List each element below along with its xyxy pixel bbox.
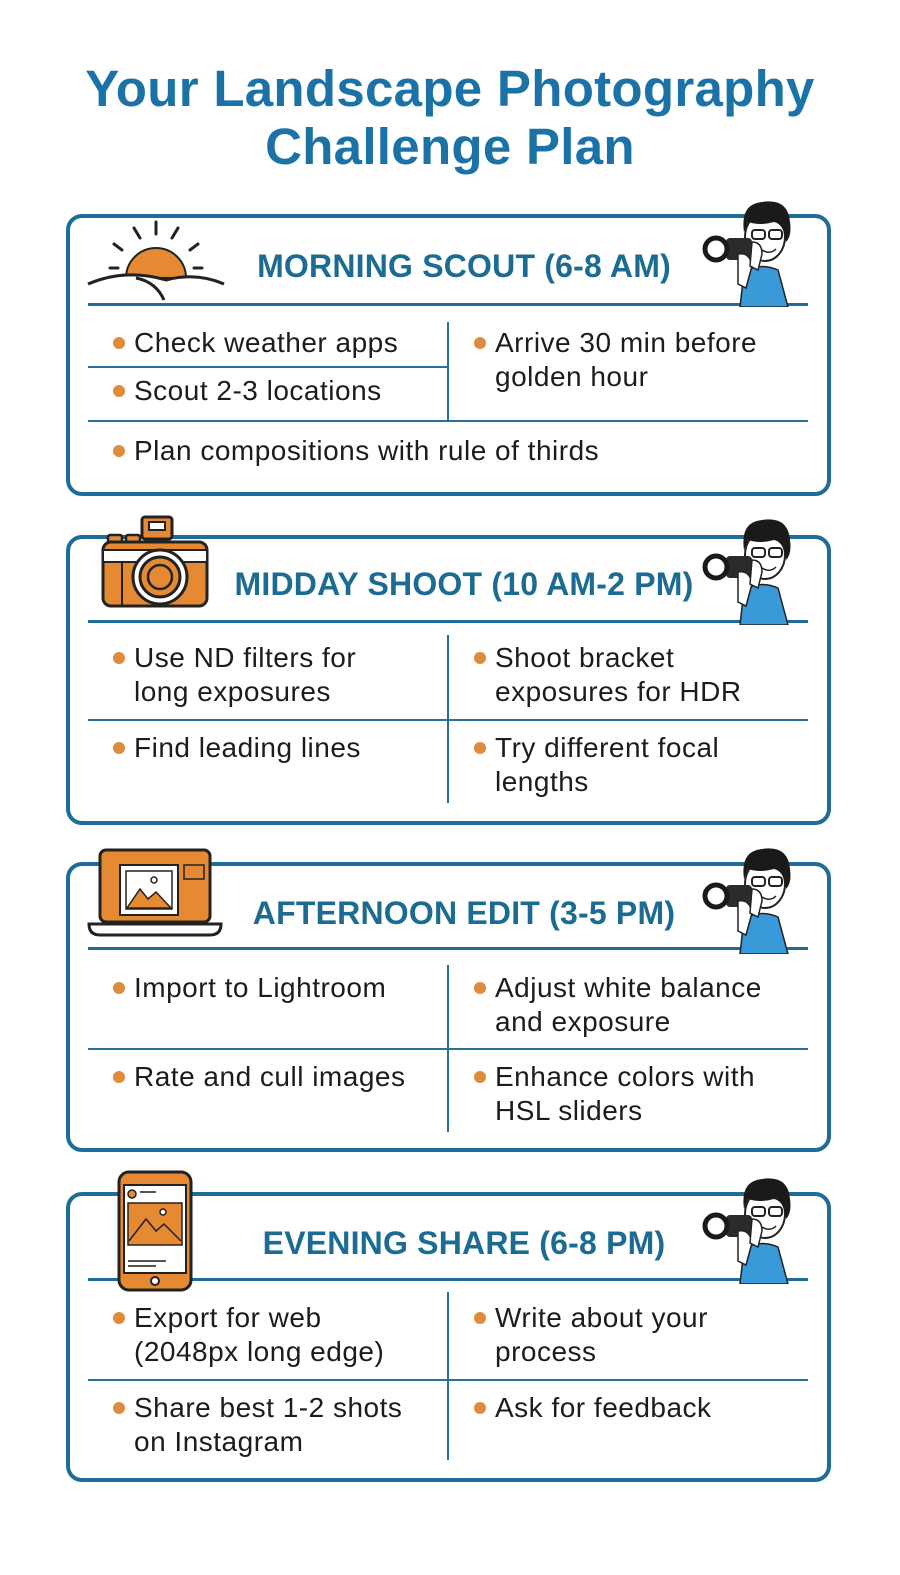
item: Enhance colors with xyxy=(495,1061,755,1092)
heading: afternoon edit: AFTERNOON EDIT (3-5 PM) xyxy=(253,895,675,931)
item: lengths xyxy=(495,766,589,797)
person icon xyxy=(702,1178,790,1284)
item: Shoot bracket xyxy=(495,642,674,673)
icon: phone xyxy=(118,1170,192,1292)
item xyxy=(495,1301,708,1369)
item: Adjust white balance xyxy=(495,972,762,1003)
person icon xyxy=(702,848,790,954)
item: exposures for HDR xyxy=(495,676,742,707)
item: long exposures xyxy=(134,676,331,707)
item: (2048px long edge) xyxy=(134,1336,384,1367)
panel: morning scout xyxy=(66,201,831,496)
item: Try different focal xyxy=(495,732,719,763)
heading: morning scout: MORNING SCOUT (6-8 AM) xyxy=(257,248,671,284)
item: Share best 1-2 shots xyxy=(134,1392,402,1423)
icon: laptop xyxy=(88,848,222,936)
item: on Instagram xyxy=(134,1426,303,1457)
item: and exposure xyxy=(495,1006,671,1037)
item: Rate and cull images xyxy=(134,1061,405,1092)
title: Your Landscape Photography xyxy=(85,60,815,117)
item: Scout 2-3 locations xyxy=(134,375,382,406)
item: Import to Lightroom xyxy=(134,972,386,1003)
item: Write about your xyxy=(495,1302,708,1333)
item: Plan compositions with rule of thirds xyxy=(134,435,599,466)
item: HSL sliders xyxy=(495,1095,643,1126)
heading: evening share: EVENING SHARE (6-8 PM) xyxy=(263,1225,665,1261)
item xyxy=(495,971,762,1039)
item: Arrive 30 min before xyxy=(495,327,757,358)
item xyxy=(495,326,757,394)
person icon xyxy=(702,201,790,307)
title: Challenge Plan xyxy=(265,118,635,175)
item: Export for web xyxy=(134,1302,322,1333)
item: Check weather apps xyxy=(134,327,398,358)
item: Find leading lines xyxy=(134,732,361,763)
item xyxy=(495,1060,755,1128)
item xyxy=(495,641,742,709)
icon: sunrise xyxy=(88,220,225,301)
item: golden hour xyxy=(495,361,648,392)
panel: midday shoot xyxy=(66,516,831,825)
icon: camera xyxy=(102,516,208,608)
item xyxy=(134,1301,384,1369)
panel: afternoon edit xyxy=(66,848,831,1152)
panel: evening share xyxy=(66,1170,831,1482)
heading: midday shoot: MIDDAY SHOOT (10 AM-2 PM) xyxy=(234,566,693,602)
person icon xyxy=(702,519,790,625)
item xyxy=(134,1391,402,1459)
title xyxy=(85,60,815,175)
item: process xyxy=(495,1336,597,1367)
item xyxy=(134,641,356,709)
item: Use ND filters for xyxy=(134,642,356,673)
item xyxy=(495,731,719,799)
item: Ask for feedback xyxy=(495,1392,712,1423)
